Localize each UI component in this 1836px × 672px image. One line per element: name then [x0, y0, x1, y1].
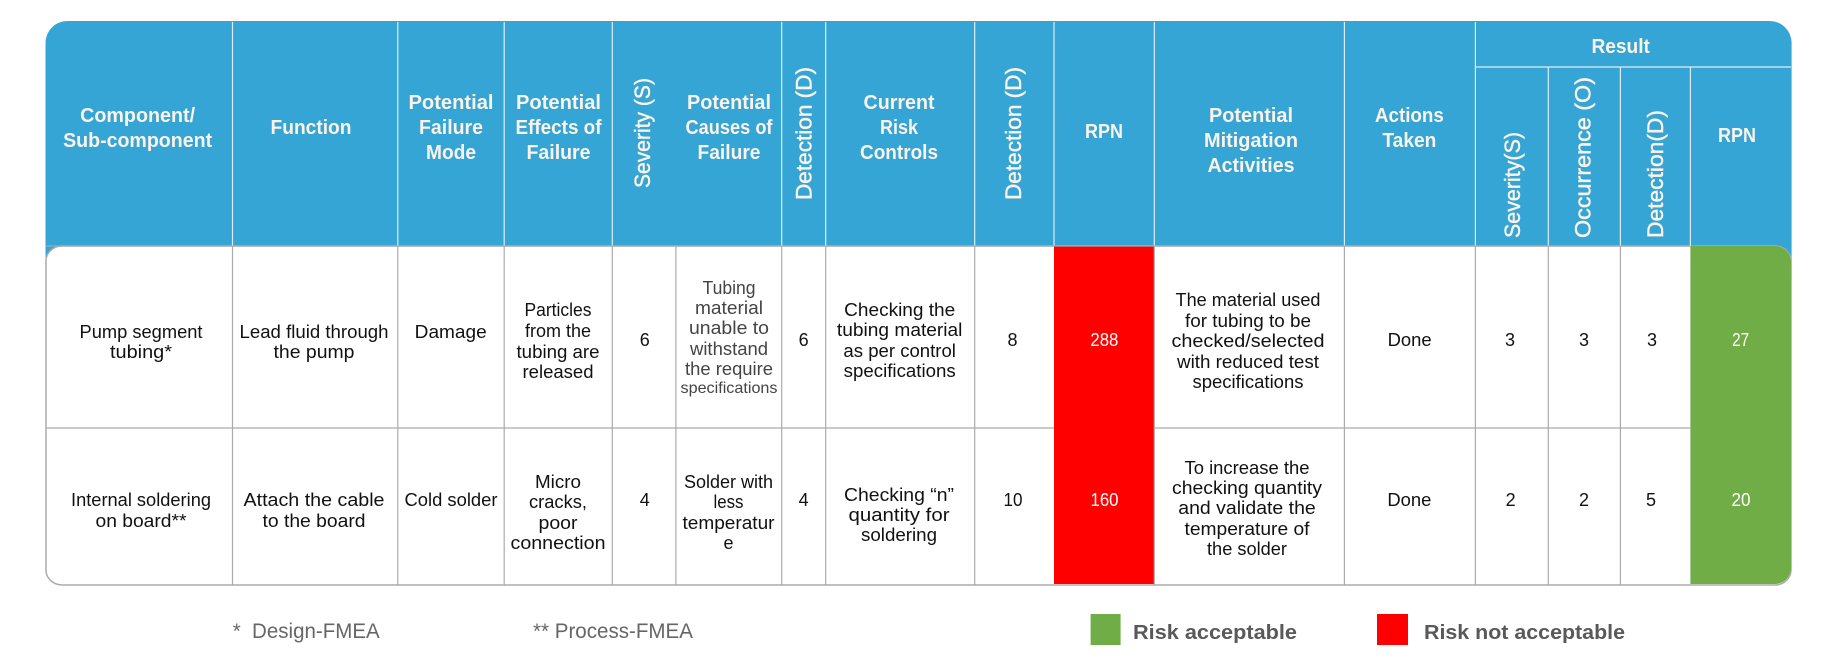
cell: actions: Done	[1388, 330, 1432, 350]
heading: function: Function	[270, 117, 352, 139]
cell: risk controls: quantity for	[848, 505, 950, 525]
heading: component: Sub-component	[63, 130, 212, 152]
cell: result detection: 5	[1646, 490, 1656, 510]
heading: current risk controls: Current	[864, 92, 935, 114]
cell: result severity: 2	[1506, 490, 1516, 510]
footnote: process FMEA: ** Process-FMEA	[533, 620, 693, 643]
cell: effects: Micro	[535, 472, 581, 492]
cell: effects	[510, 472, 606, 553]
cell: risk controls: specifications	[844, 361, 956, 381]
cell: component	[71, 490, 211, 531]
cell: component: on board**	[96, 511, 186, 531]
heading: potential causes of failure: Potential	[687, 92, 771, 114]
cell: function: to the board	[262, 511, 366, 531]
heading: component: Component/	[80, 105, 196, 127]
legend: risk not acceptable: Risk not acceptable	[1424, 622, 1625, 644]
value: RPN 160: 160	[1090, 490, 1118, 510]
row 2: internal soldering on board	[71, 458, 1656, 559]
heading: potential failure mode: Potential	[408, 92, 494, 114]
cell: function	[240, 322, 388, 362]
RPN column: green acceptable cells	[1690, 246, 1791, 584]
cell: risk controls: tubing material	[837, 320, 962, 340]
table column headings	[63, 36, 1756, 177]
cell: detection score: 10	[1004, 490, 1022, 510]
heading: actions taken: Actions	[1375, 105, 1444, 127]
value: RPN 288: 288	[1090, 330, 1118, 350]
heading: severity: Severity (S)	[630, 78, 655, 188]
cell: component: tubing*	[110, 342, 172, 362]
cell: risk controls	[837, 300, 962, 381]
cell: risk controls: as per control	[843, 341, 956, 361]
cell: causes: unable to	[689, 318, 769, 338]
cell: mitigation: and validate the	[1178, 498, 1316, 518]
cell: mitigation: specifications	[1192, 372, 1304, 392]
cell: failure mode: Damage	[415, 322, 487, 342]
heading: potential causes of failure: Causes of	[686, 117, 773, 139]
cell: risk controls: Checking the	[844, 300, 955, 320]
cell: function: the pump	[274, 342, 354, 362]
cell: causes: Solder with	[684, 472, 773, 492]
cell: result detection: 3	[1647, 330, 1657, 350]
heading: potential mitigation activities: Potential	[1209, 105, 1293, 127]
heading: potential effects of failure: Potential	[516, 92, 601, 114]
cell: mitigation	[1172, 458, 1322, 559]
heading: potential causes of failure: Failure	[698, 142, 760, 164]
cell: causes: material	[695, 298, 763, 318]
heading: actions taken	[1375, 105, 1444, 152]
cell: mitigation: temperature of	[1184, 519, 1311, 539]
cell: effects: released	[522, 362, 594, 382]
cell: mitigation: checking quantity	[1172, 478, 1322, 498]
cell: result occurrence: 3	[1579, 330, 1589, 350]
legend: risk acceptable	[1091, 614, 1297, 645]
heading: result severity: Severity(S)	[1500, 132, 1525, 238]
heading: potential causes of failure	[686, 92, 773, 164]
legend: risk acceptable: Risk acceptable	[1133, 622, 1297, 644]
cell: causes: e	[723, 533, 734, 553]
cell: effects: from the	[525, 321, 591, 341]
heading: result detection: Detection(D)	[1643, 110, 1668, 238]
cell: mitigation	[1172, 290, 1324, 392]
cell: mitigation: with reduced test	[1176, 352, 1319, 372]
panel: table body	[46, 246, 1791, 585]
heading: potential mitigation activities: Mitigation	[1204, 130, 1298, 152]
cell: effects: tubing are	[516, 342, 600, 362]
cell: detection: 6	[799, 330, 809, 350]
heading: potential failure mode	[408, 92, 494, 164]
cell: function	[244, 490, 384, 531]
cell: effects: poor	[538, 513, 578, 533]
value: result RPN 27: 27	[1732, 330, 1749, 350]
cell: risk controls: soldering	[861, 525, 937, 545]
heading: RPN: RPN	[1085, 121, 1123, 143]
heading: potential mitigation activities: Activities	[1208, 155, 1294, 177]
cell: causes: less	[714, 492, 744, 512]
cell: effects	[516, 300, 600, 382]
heading: current risk controls: Controls	[860, 142, 938, 164]
legend: risk not acceptable	[1377, 614, 1625, 645]
cell: effects: connection	[510, 533, 606, 553]
cell: risk controls: Checking “n”	[844, 485, 954, 505]
panel: table header background	[46, 21, 1792, 280]
cell: risk controls	[844, 485, 954, 545]
cell: causes: temperatur	[682, 513, 774, 533]
heading: current risk controls	[860, 92, 938, 164]
cell: component	[80, 322, 202, 362]
rotated column headings	[630, 67, 1668, 238]
cell: function: Attach the cable	[244, 490, 384, 510]
heading: result occurrence: Occurrence (O)	[1571, 77, 1596, 238]
heading: actions taken: Taken	[1382, 130, 1436, 152]
heading: detection after controls: Detection (D)	[1001, 67, 1026, 200]
cell: failure mode: Cold solder	[404, 490, 498, 510]
cell: causes	[682, 472, 774, 553]
heading: potential failure mode: Mode	[426, 142, 476, 164]
cell: mitigation: To increase the	[1184, 458, 1310, 478]
heading: potential effects of failure: Failure	[526, 142, 590, 164]
heading: component	[63, 105, 212, 152]
heading: result: Result	[1591, 36, 1650, 58]
cell: causes: the require	[685, 359, 773, 379]
cell: mitigation: checked/selected	[1172, 331, 1324, 351]
heading: potential failure mode: Failure	[419, 117, 483, 139]
cell: causes: specifications	[680, 380, 778, 397]
heading: potential effects of failure	[516, 92, 602, 164]
heading: detection: Detection (D)	[792, 67, 817, 200]
cell: effects: cracks,	[529, 492, 587, 512]
cell: component: Pump segment	[80, 322, 202, 342]
heading: potential mitigation activities	[1204, 105, 1298, 177]
heading: result RPN: RPN	[1718, 125, 1756, 147]
cell: mitigation: the solder	[1207, 539, 1287, 559]
cell: severity: 4	[640, 490, 650, 510]
cell: function: Lead fluid through	[240, 322, 388, 342]
cell: causes	[680, 278, 778, 397]
RPN column: red not acceptable cells	[1054, 246, 1154, 584]
cell: component: Internal soldering	[71, 490, 211, 510]
cell: detection: 4	[799, 490, 809, 510]
cell: causes: withstand	[689, 339, 768, 359]
cell: causes: Tubing	[702, 278, 756, 298]
cell: detection score: 8	[1007, 330, 1018, 350]
cell: result severity: 3	[1505, 330, 1515, 350]
footnote: design FMEA: * Design-FMEA	[233, 620, 380, 643]
cell: effects: Particles	[524, 300, 592, 320]
cell: severity: 6	[640, 330, 650, 350]
cell: actions: Done	[1387, 490, 1431, 510]
value: result RPN 20: 20	[1732, 490, 1750, 510]
row 1: pump segment tubing	[80, 278, 1657, 397]
cell: mitigation: for tubing to be	[1185, 311, 1311, 331]
heading: potential effects of failure: Effects of	[516, 117, 602, 139]
heading: current risk controls: Risk	[880, 117, 919, 139]
cell: result occurrence: 2	[1579, 490, 1589, 510]
cell: mitigation: The material used	[1176, 290, 1320, 310]
